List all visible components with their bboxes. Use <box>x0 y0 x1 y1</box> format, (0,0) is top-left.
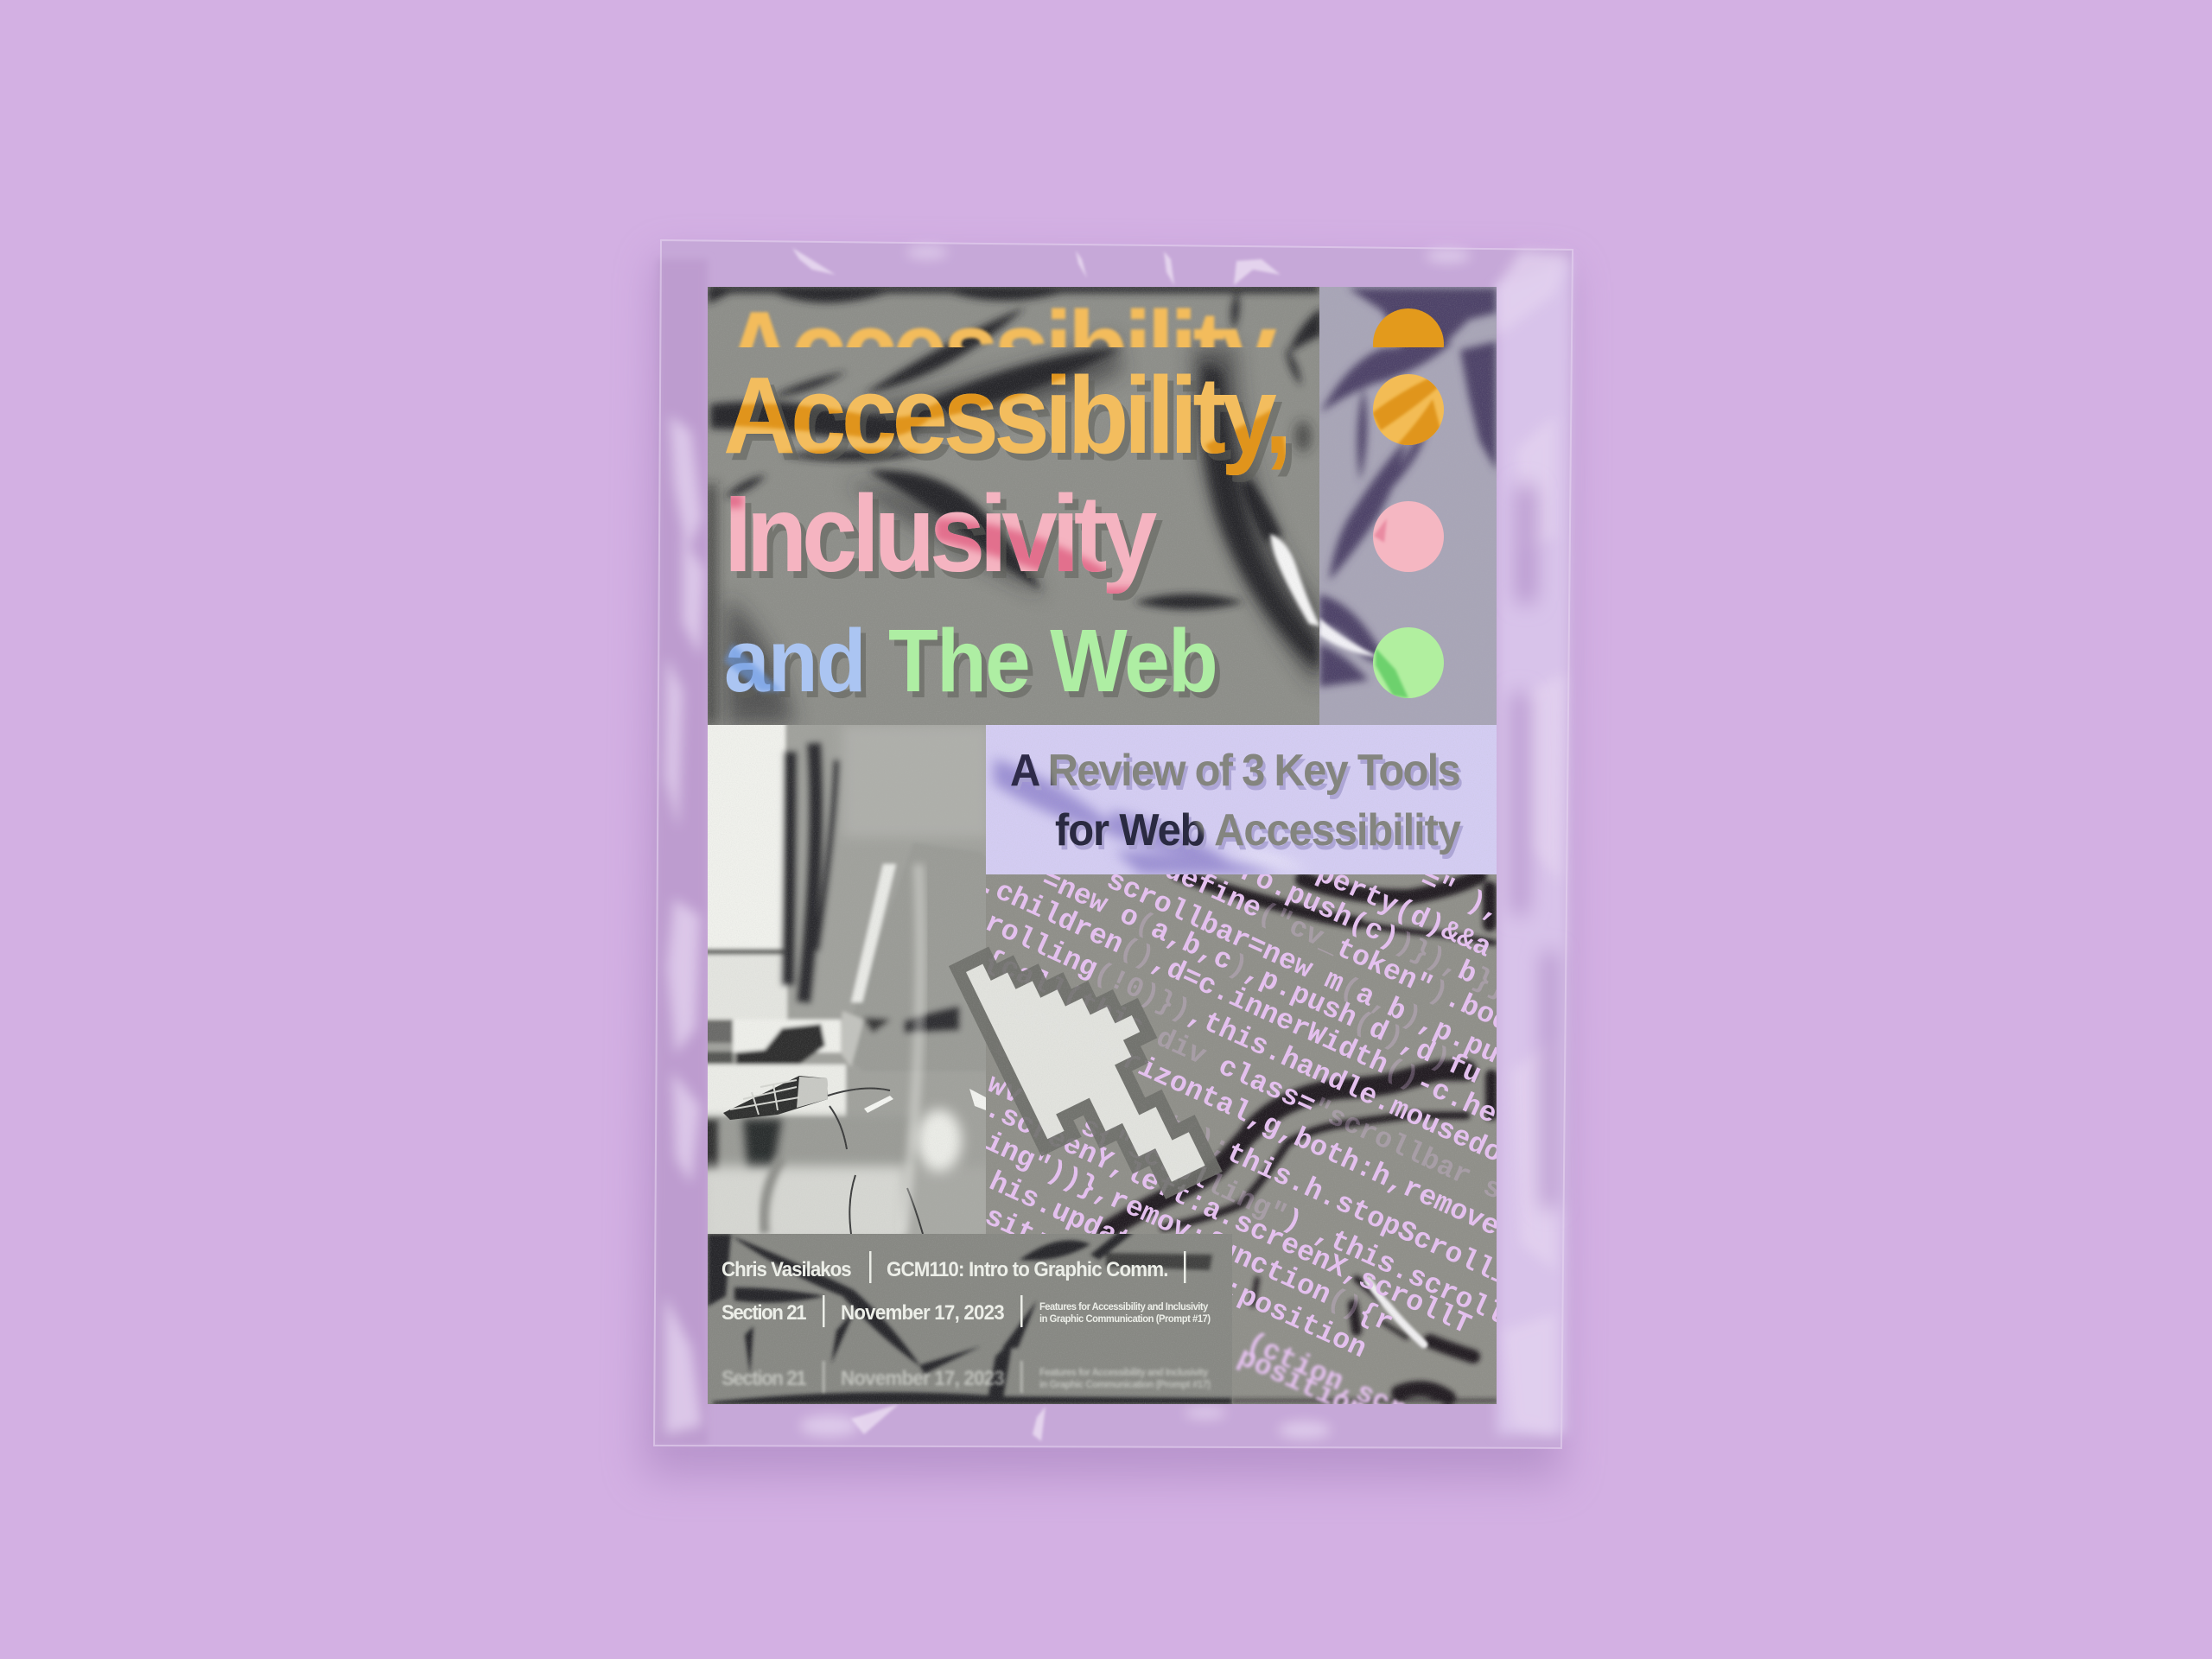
crumple streaks behind the code <box>1106 874 1497 1401</box>
code text: .children(),d=c.innerWidth()-c.he <box>975 868 1502 1131</box>
code text: (ction,scroll <box>1242 1326 1457 1448</box>
crumple streaks: right panel <box>1319 288 1497 687</box>
code text: .find("horizontal,g,both:h,remove <box>977 980 1504 1243</box>
ghost footer text: in Graphic Communication (Prompt #17) <box>1039 1380 1211 1390</box>
lavender panel streaks <box>994 759 1309 874</box>
divider <box>1020 1295 1023 1327</box>
ghost footer text <box>721 1361 1211 1393</box>
ghost footer text: November 17, 2023 <box>841 1366 1005 1389</box>
subtitle <box>1002 745 1464 859</box>
cursor arrow <box>959 915 1205 1226</box>
code text: .screenY,left:a.screenX,scrollT <box>980 1092 1476 1342</box>
code text: wv s{"scrolling") ,this.scroll <box>982 1068 1510 1332</box>
code text: =" ),f <box>1415 863 1522 935</box>
code text: sit; <box>980 1200 1055 1258</box>
prompt note <box>1039 1302 1211 1325</box>
orange dot <box>1372 374 1445 449</box>
divider <box>869 1251 871 1283</box>
title: The Web: The Web <box>888 610 1218 710</box>
code text: his.update(a,b);position <box>984 1166 1371 1365</box>
crumple streaks: main panel <box>706 285 1322 725</box>
code text: ing"))},remov:function(){r <box>980 1126 1398 1340</box>
photo panel: computer desk <box>700 717 994 1244</box>
ghost orange dot <box>1373 308 1444 379</box>
code text: {call(this.div class="scrollbar sh <box>980 944 1522 1214</box>
subtitle line 2: for Web Accessibility <box>1055 804 1461 855</box>
pink dot <box>1373 501 1444 572</box>
footer panel streaks <box>708 1214 1232 1404</box>
code text: position()(scroll <box>1233 1341 1511 1491</box>
code panel <box>975 854 1546 1491</box>
code text: ro.push(c))}),b}} <box>1235 855 1513 1006</box>
code text: define("cv_token").bod <box>1160 854 1516 1039</box>
footer text <box>721 1251 1211 1327</box>
prompt note: in Graphic Communication (Prompt #17) <box>1039 1314 1211 1325</box>
code text: =new o(a,b,c),p.push(d),d)fu <box>1037 863 1486 1091</box>
ghost footer text: Section 21 <box>721 1366 807 1389</box>
date: November 17, 2023 <box>841 1300 1005 1324</box>
section: Section 21 <box>721 1300 807 1324</box>
paper grain <box>708 287 1497 1404</box>
subtitle line 1: A Review of 3 Key Tools <box>1010 745 1461 795</box>
plastic bag <box>654 240 1573 1448</box>
title: and: and <box>724 610 867 710</box>
author: Chris Vasilakos <box>721 1257 852 1281</box>
course: GCM110: Intro to Graphic Comm. <box>887 1257 1168 1281</box>
title: Inclusivity: Inclusivity <box>724 473 1157 594</box>
code text: this.persist();this.h.stopScrolling <box>988 1030 1546 1308</box>
divider <box>823 1295 824 1327</box>
poster: base panels <box>708 287 1497 1404</box>
code text: scrollbar=new m(a,b),p.pu <box>1102 864 1504 1071</box>
code text <box>975 854 1546 1491</box>
bag shadow <box>644 259 1568 1479</box>
ghost title strip: Accessibility, <box>723 289 1293 410</box>
code text: perty(d)&&a <box>1312 857 1496 964</box>
prompt note: Features for Accessibility and Inclusivity <box>1039 1302 1209 1313</box>
ghost footer text: Features for Accessibility and Inclusivity <box>1039 1368 1209 1378</box>
title: Accessibility,: Accessibility, <box>723 354 1293 476</box>
green dot <box>1373 627 1444 698</box>
divider <box>1184 1251 1185 1283</box>
code text: rolling(!0)}),this.handle.mousedo <box>980 906 1507 1170</box>
keyboard <box>723 1076 828 1120</box>
